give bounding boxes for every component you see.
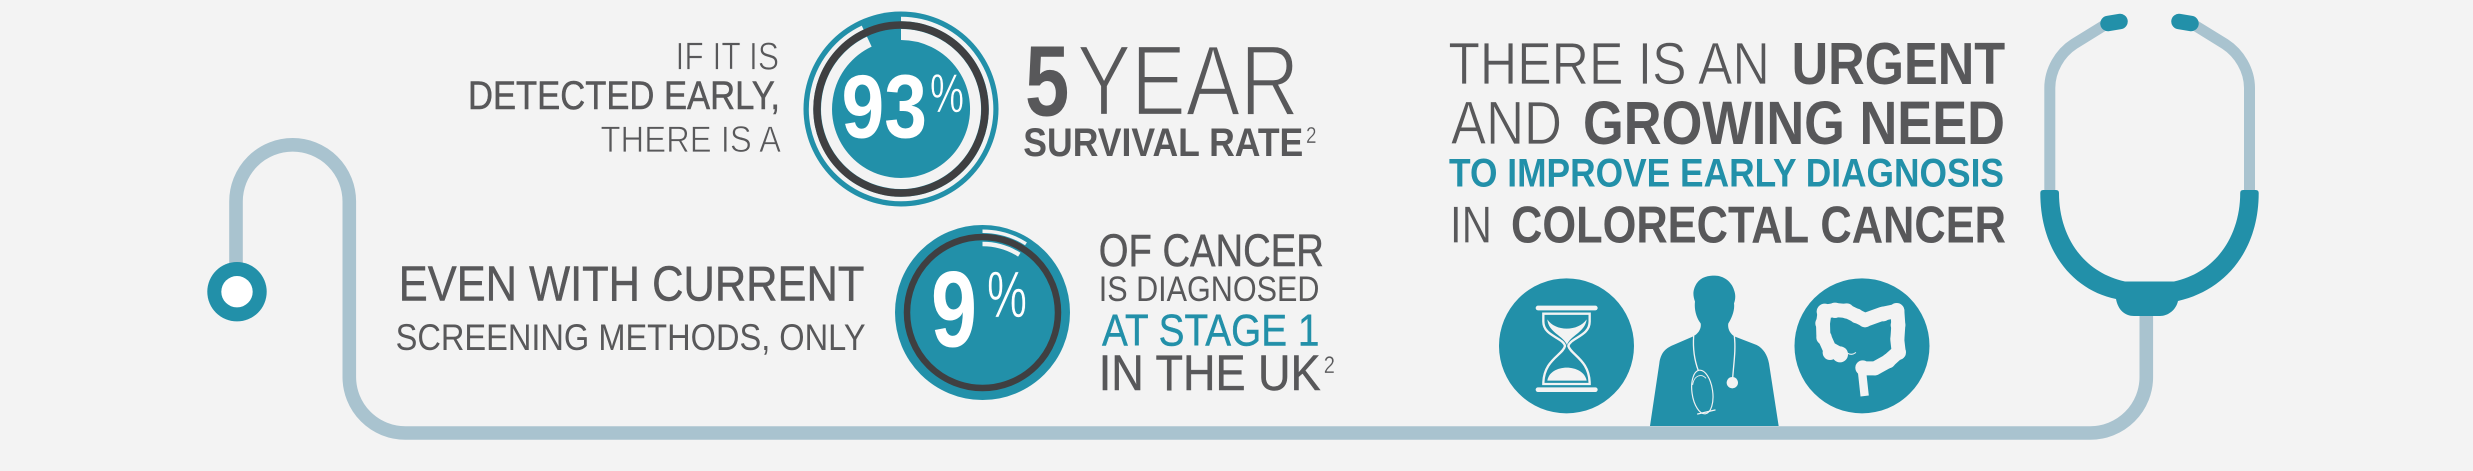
text: 5 year survival rate: 2	[1306, 122, 1316, 148]
icon: chest piece ring	[207, 262, 267, 321]
chart: 93 percent donut	[804, 12, 998, 206]
text: 5 year survival rate: YEAR	[1077, 25, 1299, 137]
icon: colon	[1794, 278, 1929, 413]
stethoscope tube running across the page	[236, 145, 2146, 433]
chart: 93 percent donut: %	[930, 62, 964, 124]
icon: stethoscope headset	[2040, 22, 2259, 316]
text: of cancer diagnosed at stage 1 in the UK	[1099, 225, 1335, 401]
chart: 9 percent donut: %	[987, 257, 1027, 331]
text: if detected early	[468, 35, 781, 160]
block: 9 percent diagnosed at stage 1	[396, 225, 1335, 401]
text: 5 year survival rate	[1023, 25, 1316, 165]
text: 5 year survival rate: SURVIVAL RATE	[1023, 121, 1303, 165]
heading: urgent and growing need: IN	[1450, 196, 1492, 254]
text: of cancer diagnosed at stage 1 in the UK: 2	[1324, 352, 1335, 379]
text: if detected early: THERE IS A	[600, 119, 781, 160]
heading: urgent and growing need: COLORECTAL CANCER	[1511, 196, 2006, 254]
text: if detected early: IF IT IS	[676, 35, 779, 78]
chart: 93 percent donut: 93	[842, 58, 927, 158]
text: 5 year survival rate: 5	[1025, 26, 1069, 138]
heading: urgent and growing need: THERE IS AN	[1448, 31, 1770, 97]
text: even with current screening: EVEN WITH CURRENT	[399, 257, 864, 312]
heading: urgent and growing need: GROWING NEED	[1583, 89, 2005, 158]
heading: urgent and growing need: AND	[1451, 89, 1562, 158]
chart: 9 percent donut	[895, 225, 1070, 400]
text: of cancer diagnosed at stage 1 in the UK: OF CANCER	[1099, 225, 1324, 276]
text: of cancer diagnosed at stage 1 in the UK: AT STAGE 1	[1102, 307, 1319, 356]
chart: 9 percent donut: 9	[931, 249, 977, 370]
heading: urgent and growing need: URGENT	[1792, 31, 2005, 97]
text: if detected early: DETECTED EARLY,	[468, 74, 780, 118]
icon: hourglass	[1499, 278, 1634, 413]
icon: doctor with stethoscope	[1650, 276, 1779, 426]
heading: urgent and growing need: TO IMPROVE EARLY DIAGNOSIS	[1449, 152, 2004, 196]
text: even with current screening: SCREENING METHODS, ONLY	[396, 316, 866, 358]
text: of cancer diagnosed at stage 1 in the UK: IS DIAGNOSED	[1099, 269, 1319, 309]
heading: urgent and growing need	[1448, 31, 2006, 254]
text: of cancer diagnosed at stage 1 in the UK: IN THE UK	[1099, 345, 1321, 401]
block: 93 percent survival	[468, 12, 1316, 206]
text: even with current screening	[396, 257, 866, 358]
